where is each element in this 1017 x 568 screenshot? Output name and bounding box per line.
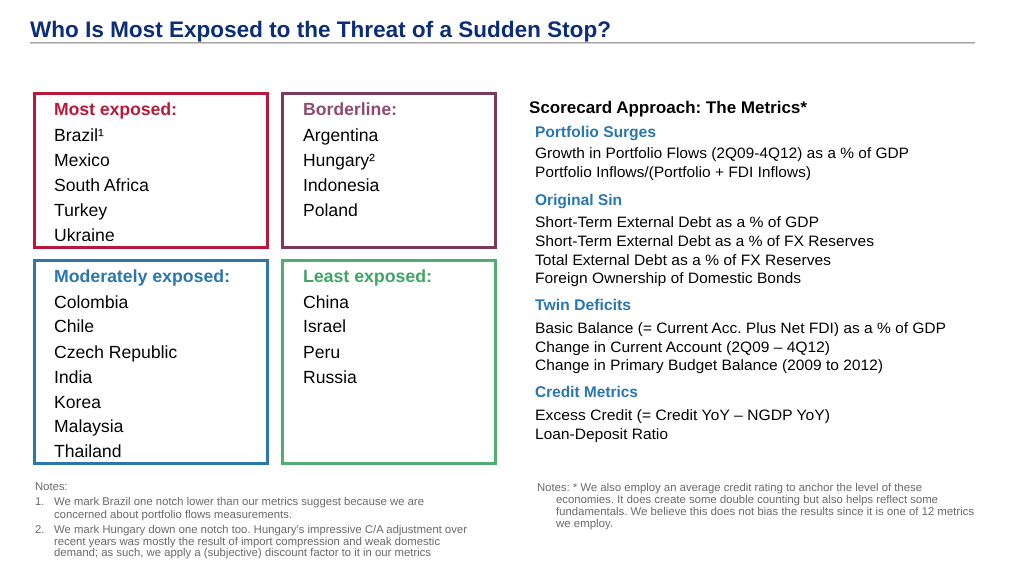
panel: most exposed: Most exposed: [54, 99, 177, 119]
notes: right: we employ. [555, 518, 613, 530]
panel: least exposed: China [303, 292, 349, 312]
panel: borderline: Indonesia [303, 175, 380, 195]
panel: moderately exposed: Chile [54, 316, 94, 336]
heading: scorecard approach: Scorecard Approach: The Metrics* [529, 98, 807, 117]
panel: most exposed: Brazil¹ [54, 125, 104, 145]
metrics: original sin [535, 192, 874, 287]
notes: left: 2. [35, 524, 44, 536]
panel: least exposed: Least exposed: [303, 266, 432, 286]
metrics: credit metrics: Loan-Deposit Ratio [535, 426, 668, 443]
metrics: credit metrics [535, 384, 830, 443]
panel: moderately exposed: Czech Republic [54, 342, 177, 362]
panel: borderline [282, 94, 496, 248]
metrics: original sin: Foreign Ownership of Domestic Bonds [535, 270, 801, 287]
title: Who Is Most Exposed to the Threat of a Sudden Stop? [30, 17, 611, 42]
metrics: twin deficits: Basic Balance (= Current Acc. Plus Net FDI) as a % of GDP [535, 320, 946, 337]
panel: moderately exposed: Moderately exposed: [54, 266, 230, 286]
metrics: portfolio surges [535, 124, 909, 181]
panel: most exposed: Turkey [54, 200, 107, 220]
notes: left: recent years was mostly the result of import compression and weak domestic [54, 536, 440, 548]
metrics: credit metrics: Credit Metrics [535, 384, 638, 401]
notes: left: Notes: [35, 481, 68, 493]
notes: left: We mark Hungary down one notch too. Hungary's impressive C/A adjustment over [54, 524, 467, 536]
metrics: original sin: Short-Term External Debt as a % of GDP [535, 214, 819, 231]
metrics: original sin: Total External Debt as a % of FX Reserves [535, 252, 831, 269]
panel: least exposed: Peru [303, 342, 340, 362]
metrics: twin deficits: Twin Deficits [535, 297, 631, 314]
panel: borderline: Poland [303, 200, 358, 220]
notes: left: concerned about portfolio flows measurements. [54, 509, 292, 521]
panel: moderately exposed: Malaysia [54, 416, 124, 436]
panel: moderately exposed: Colombia [54, 292, 129, 312]
notes: right: fundamentals. We believe this does not bias the results since it is one of 12 metrics [556, 506, 974, 518]
panel: moderately exposed [34, 260, 268, 464]
panel: moderately exposed: Thailand [54, 441, 122, 461]
panel: least exposed: Israel [303, 316, 346, 336]
panel: least exposed [282, 260, 496, 464]
metrics: portfolio surges: Growth in Portfolio Flows (2Q09-4Q12) as a % of GDP [535, 145, 909, 162]
panel: least exposed: Russia [303, 367, 357, 387]
panel: most exposed: Ukraine [54, 225, 115, 245]
panel: borderline: Hungary² [303, 150, 375, 170]
notes: left: demand; as such, we apply a (subjective) discount factor to it in our metrics [54, 547, 431, 559]
notes: right: Notes: * We also employ an average credit rating to anchor the level of these [537, 482, 922, 494]
notes: left: 1. [35, 496, 44, 508]
notes: right: economies. It does create some double counting but also helps reflect some [556, 494, 938, 506]
metrics: twin deficits: Change in Primary Budget Balance (2009 to 2012) [535, 357, 883, 374]
metrics: twin deficits: Change in Current Account (2Q09 – 4Q12) [535, 339, 830, 356]
metrics: original sin: Short-Term External Debt as a % of FX Reserves [535, 233, 874, 250]
panel: moderately exposed: India [54, 367, 92, 387]
notes: left: We mark Brazil one notch lower than our metrics suggest because we are [54, 496, 424, 508]
panel: most exposed: Mexico [54, 150, 110, 170]
notes: right [537, 482, 974, 530]
panel: borderline: Borderline: [303, 99, 397, 119]
metrics: portfolio surges: Portfolio Inflows/(Portfolio + FDI Inflows) [535, 164, 811, 181]
metrics: credit metrics: Excess Credit (= Credit YoY – NGDP YoY) [535, 407, 830, 424]
notes: left [35, 481, 467, 559]
panel: borderline: Argentina [303, 125, 379, 145]
panel: most exposed [34, 94, 268, 248]
panel: moderately exposed: Korea [54, 392, 101, 412]
metrics: twin deficits [535, 297, 946, 374]
metrics: portfolio surges: Portfolio Surges [535, 124, 656, 141]
panel: most exposed: South Africa [54, 175, 149, 195]
metrics: original sin: Original Sin [535, 192, 622, 209]
